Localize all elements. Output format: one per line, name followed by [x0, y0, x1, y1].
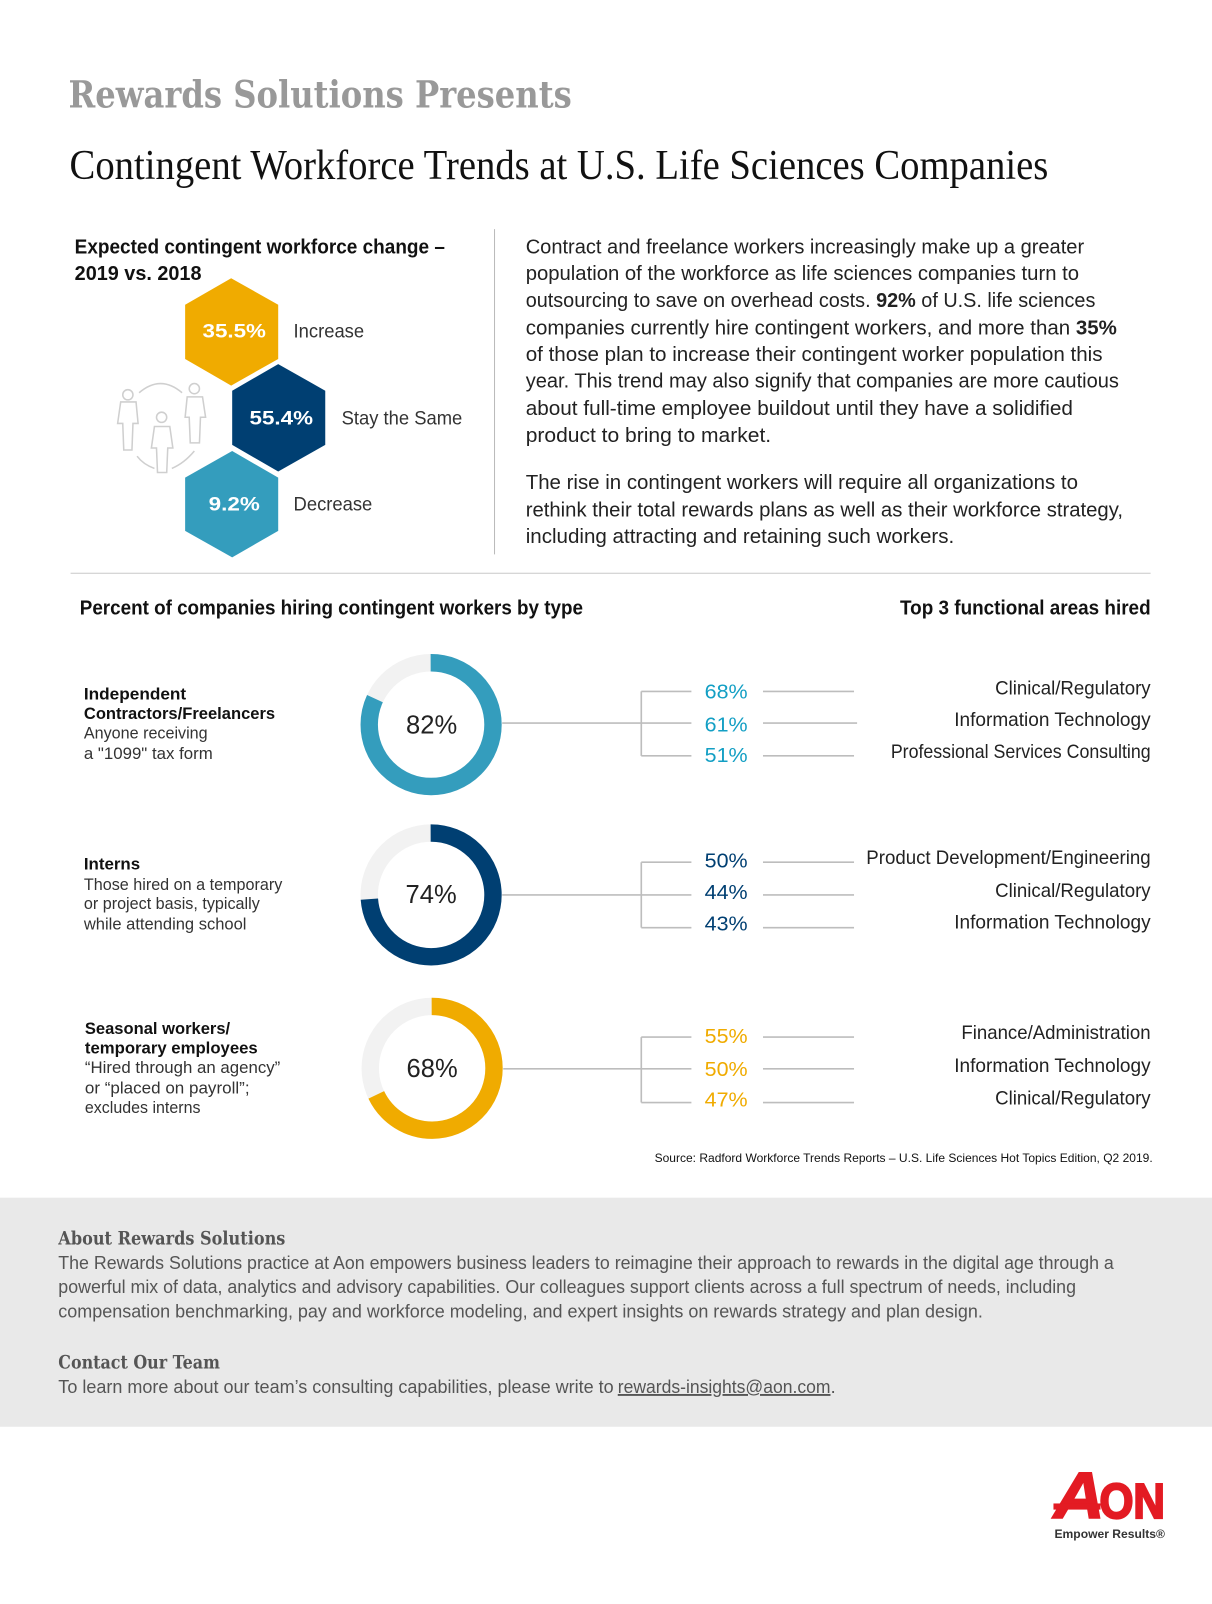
- functional areas: Clinical/Regulatory: [995, 1088, 1151, 1110]
- logo: Aon: Empower Results®: [1054, 1527, 1165, 1541]
- hexagon: increase: 35.5%: [203, 321, 266, 343]
- row text: independent contractors: Contractors/Freelancers: [84, 705, 275, 723]
- hexagon: decrease: 9.2%: [209, 493, 260, 515]
- heading: Rewards Solutions Presents: Rewards Solutions Presents: [69, 71, 572, 116]
- donut chart: 68%: [370, 1006, 494, 1130]
- text block: contact: .: [830, 1377, 836, 1398]
- row text: independent contractors: Independent: [84, 686, 187, 704]
- functional areas: [954, 1022, 1151, 1110]
- functional areas: Clinical/Regulatory: [995, 677, 1151, 699]
- text block: intro paragraph: population of the workforce as life sciences companies turn to: [526, 262, 1079, 285]
- panel heading: 2019 vs. 2018: [75, 262, 201, 285]
- label: stay the same: Stay the Same: [342, 407, 462, 429]
- row text: interns: [83, 855, 283, 934]
- label: decrease: Decrease: [294, 493, 372, 515]
- text block: about: compensation benchmarking, pay and workforce modeling, and expert insights on rewards strategy and plan design.: [58, 1301, 983, 1322]
- row text: interns: while attending school: [83, 916, 246, 934]
- text block: second paragraph: including attracting and retaining such workers.: [526, 525, 954, 548]
- row text: seasonal workers: [85, 1020, 280, 1117]
- functional areas: Information Technology: [954, 709, 1151, 731]
- donut chart: 68%: 68%: [407, 1055, 458, 1083]
- text block: contact: rewards-insights@aon.com: [618, 1377, 830, 1398]
- functional areas: Finance/Administration: [961, 1022, 1151, 1044]
- percentages: [705, 1025, 748, 1112]
- heading: contact: Contact Our Team: [58, 1352, 220, 1373]
- donut chart: 74%: [369, 833, 493, 957]
- hexagon: stay the same: 55.4%: [250, 407, 313, 429]
- text block: second paragraph: rethink their total rewards plans as well as their workforce strategy,: [526, 498, 1123, 521]
- text block: intro paragraph: companies currently hire contingent workers, and more than 35%: [526, 316, 1117, 339]
- connector lines: [502, 691, 857, 756]
- text block: intro paragraph: product to bring to market.: [526, 424, 771, 447]
- percentages: [705, 681, 748, 767]
- text block: about: The Rewards Solutions practice at Aon empowers business leaders to reimagine their approach to rewards in the digital age through a: [58, 1253, 1114, 1274]
- row text: interns: Those hired on a temporary: [84, 876, 283, 894]
- donut chart: 74%: 74%: [406, 881, 457, 909]
- functional areas: Product Development/Engineering: [866, 847, 1151, 869]
- functional areas: Professional Services Consulting: [891, 741, 1151, 763]
- row text: independent contractors: a "1099" tax form: [84, 745, 213, 763]
- functional areas: [866, 847, 1151, 934]
- title: Contingent Workforce Trends at U.S. Life Sciences Companies: [70, 143, 1048, 189]
- text block: intro paragraph: [526, 236, 1119, 447]
- logo: Aon: ON: [1099, 1475, 1165, 1529]
- panel heading: Expected contingent workforce change –: [75, 236, 445, 259]
- functional areas: Clinical/Regulatory: [995, 880, 1151, 902]
- connector lines: [502, 862, 854, 928]
- percentages: 43%: [705, 913, 748, 936]
- panel heading: [75, 236, 445, 285]
- logo: Aon: [1051, 1459, 1165, 1541]
- heading: about: About Rewards Solutions: [57, 1229, 285, 1250]
- donut chart: 82%: 82%: [406, 711, 457, 739]
- row text: seasonal workers: temporary employees: [85, 1039, 258, 1057]
- functional areas: [891, 677, 1151, 763]
- percentages: 51%: [705, 744, 748, 767]
- panel: expected workforce change: [75, 236, 462, 557]
- percentages: 50%: [705, 849, 748, 872]
- text block: intro paragraph: year. This trend may also signify that companies are more cautious: [526, 370, 1119, 393]
- row text: seasonal workers: Seasonal workers/: [85, 1020, 231, 1038]
- label: increase: Increase: [294, 321, 364, 343]
- row text: seasonal workers: excludes interns: [85, 1099, 200, 1117]
- percentages: 61%: [705, 713, 748, 736]
- percentages: [705, 849, 748, 936]
- text block: intro paragraph: Contract and freelance workers increasingly make up a greater: [526, 236, 1084, 259]
- functional areas: Information Technology: [954, 912, 1151, 934]
- percentages: 44%: [705, 881, 748, 904]
- percentages: 68%: [705, 681, 748, 704]
- row: seasonal workers: [85, 1006, 1151, 1130]
- percentages: 55%: [705, 1025, 748, 1048]
- text block: second paragraph: The rise in contingent workers will require all organizations to: [526, 471, 1078, 494]
- text block: about: [58, 1253, 1114, 1322]
- text block: intro paragraph: about full-time employee buildout until they have a solidified: [526, 397, 1073, 420]
- row: independent contractors: [84, 663, 1151, 787]
- hexagon: increase: [185, 278, 278, 386]
- connector lines: [503, 1037, 854, 1103]
- row text: independent contractors: [84, 686, 275, 763]
- row text: interns: Interns: [84, 855, 140, 873]
- percentages: 47%: [705, 1089, 748, 1112]
- row text: interns: or project basis, typically: [84, 895, 261, 913]
- icon: people in a circle: [118, 384, 206, 473]
- row: interns: [83, 833, 1151, 957]
- logo: Aon: A: [1051, 1459, 1105, 1532]
- hexagon: stay the same: [232, 364, 325, 471]
- text block: about: powerful mix of data, analytics and advisory capabilities. Our colleagues support clients across a full spectrum of needs, including: [58, 1277, 1076, 1298]
- percentages: 50%: [705, 1058, 748, 1081]
- row text: independent contractors: Anyone receiving: [84, 724, 208, 742]
- donut chart: 82%: [369, 663, 493, 787]
- panel: about and contact: [0, 1198, 1212, 1427]
- hexagon: decrease: [185, 451, 278, 557]
- text block: second paragraph: [526, 471, 1123, 548]
- text block: intro paragraph: outsourcing to save on overhead costs. 92% of U.S. life sciences: [526, 289, 1095, 312]
- text block: intro paragraph: of those plan to increase their contingent worker population this: [526, 343, 1103, 366]
- heading: top 3 functional areas: Top 3 functional areas hired: [900, 597, 1151, 620]
- functional areas: Information Technology: [954, 1055, 1151, 1077]
- row text: seasonal workers: or “placed on payroll”;: [85, 1079, 250, 1097]
- row text: seasonal workers: “Hired through an agency”: [85, 1059, 280, 1077]
- source note: Source: Radford Workforce Trends Reports – U.S. Life Sciences Hot Topics Edition, Q2 2019.: [655, 1151, 1153, 1165]
- heading: percent of companies: Percent of companies hiring contingent workers by type: [80, 597, 583, 620]
- text block: contact: To learn more about our team’s consulting capabilities, please write to: [58, 1377, 614, 1398]
